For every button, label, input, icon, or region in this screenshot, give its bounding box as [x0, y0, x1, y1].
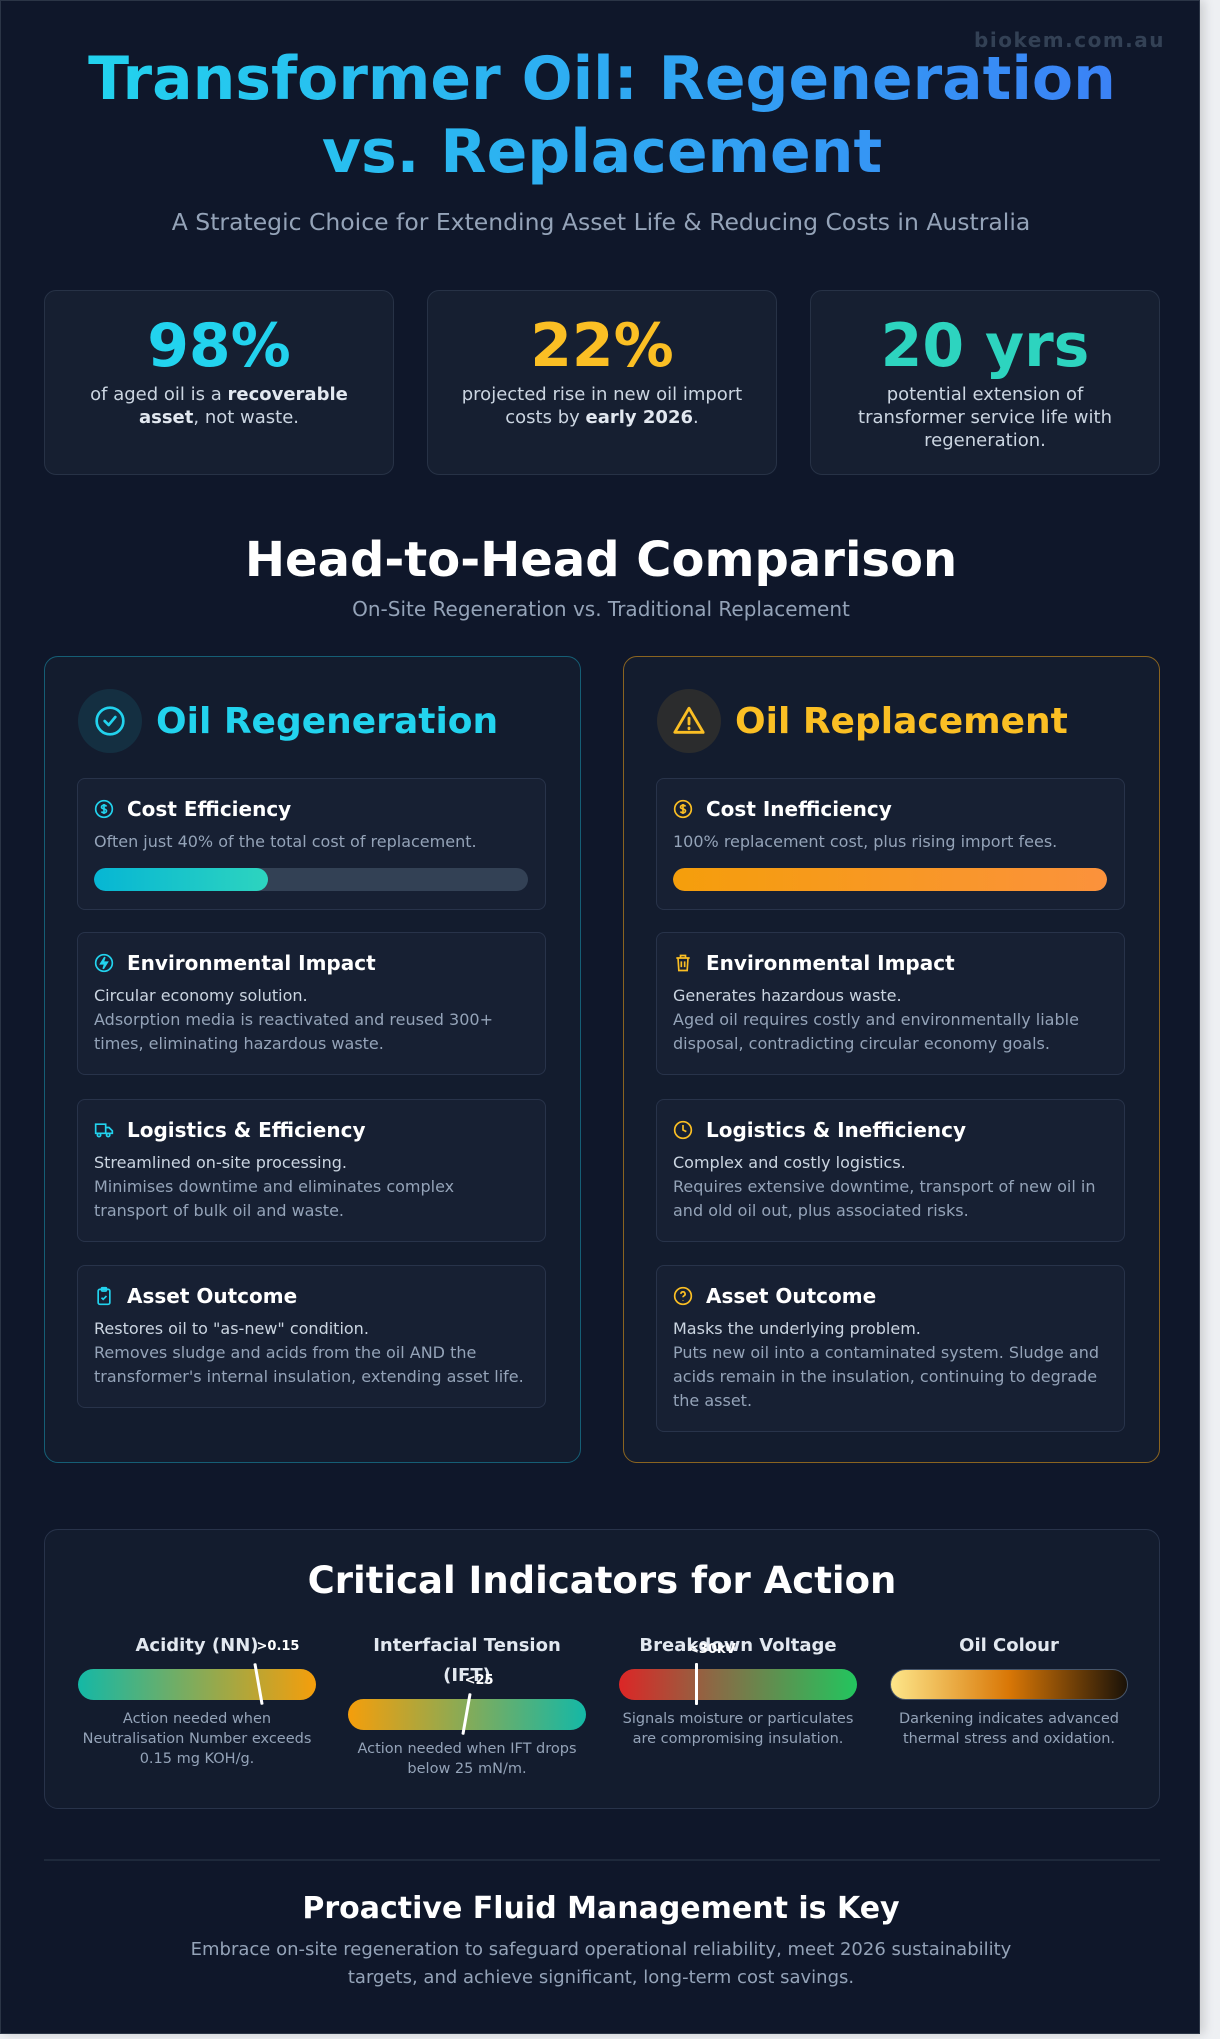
card: cost efficiency: Cost Efficiency [127, 797, 291, 821]
card: logistics: Logistics & Efficiency [127, 1118, 365, 1142]
panel: oil regeneration [44, 656, 581, 1463]
card: environmental impact: Adsorption media is reactivated and reused 300+ times, eliminating hazardous waste. [94, 1010, 493, 1053]
watermark: biokem.com.au [974, 28, 1165, 52]
card: environmental impact: Environmental Impact [706, 951, 955, 975]
stat card: 22% [427, 290, 777, 475]
indicator: breakdown voltage: Breakdown Voltage [639, 1635, 837, 1656]
indicator: IFT: Action needed when IFT drops below 25 mN/m. [357, 1741, 577, 1777]
panel: critical indicators [44, 1529, 1160, 1809]
indicator: IFT: Interfacial Tension [373, 1635, 561, 1656]
indicator: acidity: Action needed when Neutralisation Number exceeds 0.15 mg KOH/g. [83, 1711, 311, 1767]
stat card: 98%: of aged oil is a recoverable asset, not waste. [90, 384, 348, 428]
indicator: IFT: <25 [465, 1673, 494, 1688]
panel header: regeneration: Oil Regeneration [156, 700, 498, 742]
indicator: IFT: (IFT) [443, 1665, 491, 1686]
subtitle: A Strategic Choice for Extending Asset Life & Reducing Costs in Australia [172, 208, 1030, 236]
title [87, 43, 1117, 189]
panel: oil replacement [623, 656, 1160, 1463]
card: environmental impact: Environmental Impact [127, 951, 376, 975]
card: cost inefficiency: 100% replacement cost, plus rising import fees. [673, 832, 1057, 851]
indicator: oil colour: Oil Colour [959, 1635, 1059, 1656]
footer text: targets, and achieve significant, long-term cost savings. [348, 1967, 854, 1988]
card: logistics: Requires extensive downtime, transport of new oil in and old oil out, plus associated risks. [673, 1177, 1095, 1220]
indicator: breakdown voltage [619, 1635, 857, 1747]
card: asset outcome: Asset Outcome [706, 1284, 876, 1308]
card: logistics: Complex and costly logistics. [673, 1153, 906, 1172]
panel header: regeneration [78, 689, 498, 753]
card: asset outcome: Removes sludge and acids from the oil AND the transformer's internal insulation, extending asset life. [94, 1343, 524, 1386]
section heading: Head-to-Head Comparison [245, 532, 957, 588]
indicator: oil colour: Darkening indicates advanced thermal stress and oxidation. [899, 1711, 1119, 1747]
indicator: acidity [78, 1635, 316, 1767]
indicator: breakdown voltage: <30kV [688, 1642, 736, 1657]
stat card: 98%: 98% [147, 311, 291, 381]
indicator: acidity: >0.15 [256, 1639, 299, 1654]
stat card: 20 yrs: potential extension of transformer service life with regeneration. [858, 384, 1112, 451]
title: vs. Replacement [322, 117, 882, 187]
stat card: 20 yrs [810, 290, 1160, 475]
stat card: 22%: 22% [530, 311, 674, 381]
indicator: oil colour [890, 1635, 1128, 1747]
card: cost efficiency [77, 778, 546, 910]
section subheading: On-Site Regeneration vs. Traditional Replacement [352, 597, 850, 621]
footer text: Embrace on-site regeneration to safeguard operational reliability, meet 2026 sustainability [191, 1939, 1011, 1960]
card: environmental impact: Circular economy solution. [94, 986, 308, 1005]
footer heading: Proactive Fluid Management is Key [302, 1891, 900, 1926]
card: cost efficiency: Often just 40% of the total cost of replacement. [94, 832, 477, 851]
stat card: 20 yrs: 20 yrs [881, 311, 1089, 381]
card: environmental impact [656, 932, 1125, 1075]
title: Transformer Oil: Regeneration [88, 44, 1116, 114]
indicator: breakdown voltage: Signals moisture or particulates are compromising insulation. [623, 1711, 853, 1747]
card: asset outcome: Puts new oil into a contaminated system. Sludge and acids remain in the insulation, continuing to degrade the asset. [673, 1343, 1099, 1410]
card: environmental impact: Aged oil requires costly and environmentally liable disposal, contradicting circular economy goals. [673, 1010, 1079, 1053]
indicator: acidity: Acidity (NN) [135, 1635, 258, 1656]
card: asset outcome: Masks the underlying problem. [673, 1319, 921, 1338]
indicators title: Critical Indicators for Action [308, 1559, 896, 1602]
card: cost inefficiency: Cost Inefficiency [706, 797, 892, 821]
card: logistics: Logistics & Inefficiency [706, 1118, 966, 1142]
card: logistics: Streamlined on-site processing. [94, 1153, 347, 1172]
panel header: replacement [657, 689, 1068, 753]
card: asset outcome: Asset Outcome [127, 1284, 297, 1308]
footer text [191, 1939, 1011, 1988]
card: asset outcome: Restores oil to "as-new" condition. [94, 1319, 369, 1338]
card: environmental impact: Generates hazardous waste. [673, 986, 902, 1005]
card: environmental impact [77, 932, 546, 1075]
card: logistics [656, 1099, 1125, 1242]
card: logistics [77, 1099, 546, 1242]
panel header: replacement: Oil Replacement [735, 700, 1068, 742]
card: asset outcome [77, 1265, 546, 1408]
card: cost inefficiency [656, 778, 1125, 910]
card: asset outcome [656, 1265, 1125, 1432]
stat card: 98% [44, 290, 394, 475]
card: logistics: Minimises downtime and eliminates complex transport of bulk oil and waste. [94, 1177, 454, 1220]
stat card: 22%: projected rise in new oil import costs by early 2026. [462, 384, 742, 428]
indicator: IFT [348, 1635, 586, 1777]
